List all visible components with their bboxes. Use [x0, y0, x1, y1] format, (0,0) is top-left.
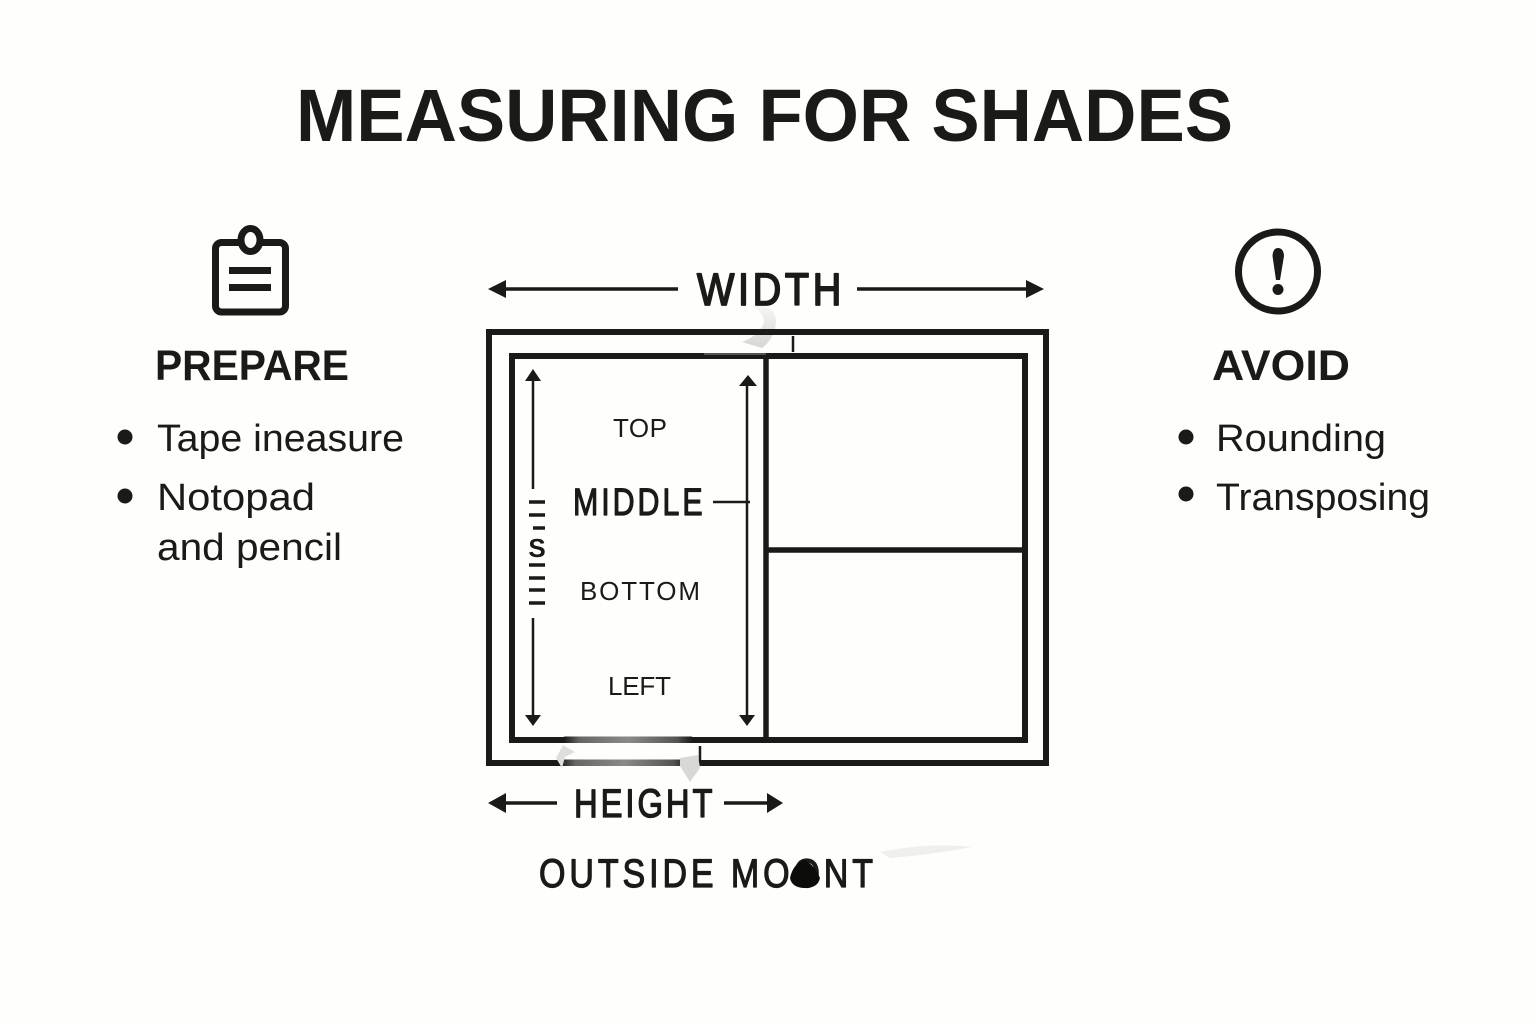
panel: prepare [118, 228, 404, 569]
smudges: bottom of frame [556, 353, 972, 858]
pane dividers [766, 356, 1025, 740]
inner frame [512, 356, 1025, 740]
heading: prepare: PREPARE [155, 342, 349, 390]
list: avoid items: Transposing [1216, 477, 1430, 519]
list: prepare items: and pencil [157, 527, 342, 569]
left height arrow with ruler [525, 369, 546, 726]
width label and arrows [488, 265, 1044, 315]
frame tick marks [700, 336, 793, 763]
list: avoid items [1178, 418, 1430, 519]
right height arrow [713, 375, 757, 726]
labels: top middle bottom left: MIDDLE [573, 482, 703, 524]
icon: warning circle [1238, 232, 1318, 311]
height label and arrows: HEIGHT [574, 781, 713, 826]
heading: avoid: AVOID [1212, 342, 1350, 390]
list: prepare items: Tape ineasure [157, 418, 404, 460]
panel: avoid [1178, 232, 1430, 519]
list: avoid items: Rounding [1216, 418, 1386, 460]
height label and arrows [488, 781, 783, 826]
outer frame [489, 332, 1046, 763]
left height arrow with ruler: S [528, 533, 546, 563]
labels: top middle bottom left: BOTTOM [580, 576, 700, 606]
diagram: window measuring [488, 265, 1046, 896]
title: MEASURING FOR SHADES [296, 74, 1233, 157]
outside mount label: OUTSIDE MOONT [539, 850, 873, 896]
labels: top middle bottom left [573, 413, 703, 701]
labels: top middle bottom left: TOP [613, 413, 667, 443]
list: prepare items: Notopad [157, 477, 315, 519]
smudge: top of frame [742, 306, 776, 348]
labels: top middle bottom left: LEFT [608, 671, 671, 701]
width label and arrows: WIDTH [697, 265, 841, 315]
icon: clipboard [216, 228, 286, 312]
list: prepare items [118, 418, 404, 569]
